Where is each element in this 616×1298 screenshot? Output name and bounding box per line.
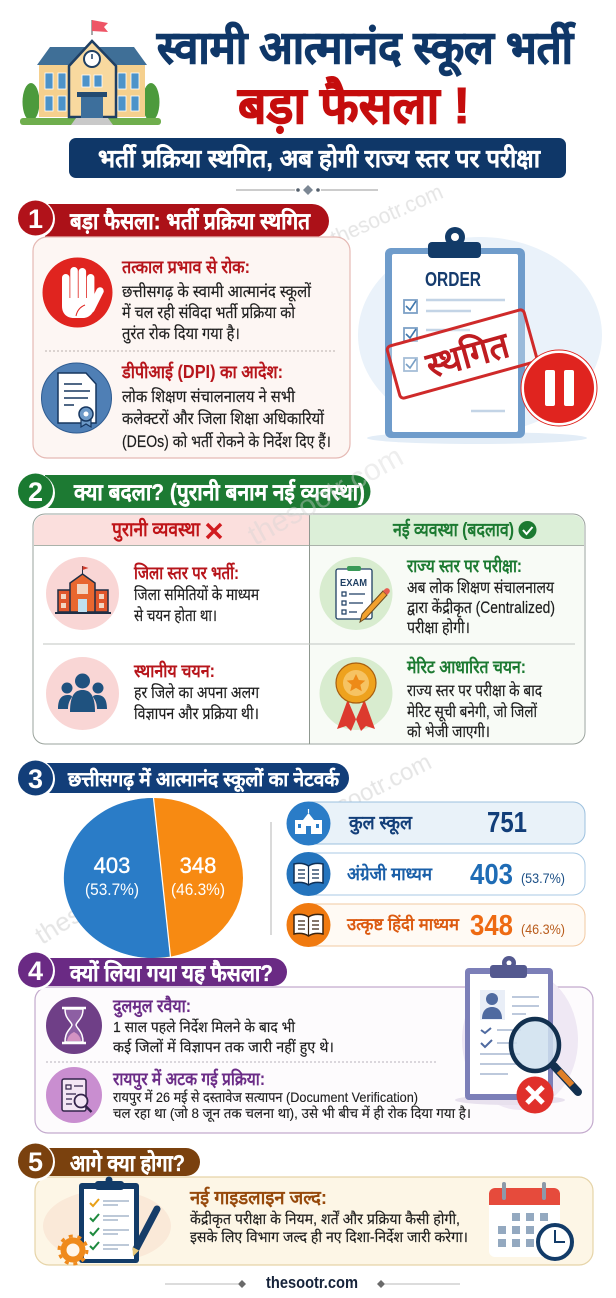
title line 2: बड़ा फैसला !: [237, 76, 470, 134]
slice label: 348: 348: [180, 853, 216, 878]
panel: comparison table: [33, 514, 585, 744]
icon: pen: [132, 1209, 157, 1256]
section 1 heading: [16, 200, 329, 238]
row: district recruitment: से चयन होता था।: [134, 606, 217, 625]
text: stuck in raipur: चल रहा था (जो 8 जून तक चलना था), उसे भी बीच में ही रोक दिया गया है।: [113, 1105, 471, 1122]
watermarks under the content: thesootr.com: [29, 845, 172, 950]
pie chart: school network: [64, 798, 243, 958]
panel: section 5 next steps: [35, 1176, 593, 1265]
text: DPI order: लोक शिक्षण संचालनालय ने सभी: [122, 387, 296, 406]
icon: certificate document: [42, 363, 112, 433]
subtitle banner: भर्ती प्रक्रिया स्थगित, अब होगी राज्य स्तर पर परीक्षा: [98, 144, 541, 173]
illustration: clipboard inspection: [455, 956, 578, 1114]
icon: medal: [320, 657, 392, 731]
watermarks under the content: thesootr.com: [327, 179, 447, 251]
watermarks under the content: thesootr.com: [302, 749, 436, 834]
icon: school: [286, 802, 330, 846]
section 2 heading: क्या बदला? (पुरानी बनाम नई व्यवस्था): [73, 478, 365, 507]
section 5 heading: 5: [28, 1147, 43, 1177]
section 2 heading: 2: [28, 477, 43, 507]
icon: school building: [20, 20, 161, 125]
section 4 heading: 4: [28, 956, 43, 986]
icon: gear: [59, 1236, 87, 1264]
stat row: english medium: अंग्रेजी माध्यम: [347, 863, 433, 884]
stamp: [386, 309, 538, 399]
watermark over table header: thesootr.com: [242, 440, 409, 552]
row: local selection: स्थानीय चयन:: [133, 660, 215, 681]
icon: magnifier: [511, 1019, 578, 1092]
row: district recruitment: [46, 557, 260, 630]
slice label: 403: [85, 853, 139, 899]
text: immediate stop: छत्तीसगढ़ के स्वामी आत्मानंद स्कूलों: [122, 282, 312, 302]
icon: hourglass: [46, 997, 102, 1054]
right column header: [310, 515, 584, 545]
icon: checklist clipboard: [59, 1176, 157, 1264]
section 1 heading: बड़ा फैसला: भर्ती प्रक्रिया स्थगित: [69, 207, 311, 234]
text: new guideline: नई गाइडलाइन जल्द:: [189, 1186, 327, 1209]
text: immediate stop: में चल रही संविदा भर्ती प्रक्रिया को: [122, 303, 296, 322]
stat row: hindi medium: (46.3%): [521, 921, 565, 937]
icon: book: [286, 852, 330, 896]
icon: school: [46, 557, 119, 630]
text: stuck in raipur: [112, 1068, 471, 1122]
icon: document with magnifier: [46, 1067, 102, 1123]
row: state exam: परीक्षा होगी।: [407, 618, 470, 637]
row: merit selection: मेरिट सूची बनेगी, जो जिलों: [407, 702, 538, 722]
stat row: hindi medium: 348: [470, 910, 513, 942]
icon: pause: [521, 350, 597, 426]
title line 1: स्वामी आत्मानंद स्कूल भर्ती: [156, 21, 576, 77]
section 3 heading: [16, 760, 349, 798]
text: immediate stop: [121, 256, 312, 344]
row: state exam: अब लोक शिक्षण संचालनालय: [407, 578, 554, 597]
footer: thesootr.com: [266, 1273, 358, 1292]
panel: section 1 decision: [33, 237, 350, 458]
text: new guideline: इसके लिए विभाग जल्द ही नए दिशा-निर्देश जारी करेगा।: [190, 1228, 468, 1246]
left column header: [34, 515, 310, 545]
row: merit selection: [320, 656, 542, 741]
text: wavering approach: [112, 995, 334, 1057]
text: new guideline: [189, 1186, 468, 1246]
order label: ORDER: [425, 269, 481, 291]
icon: book: [286, 903, 330, 947]
row: district recruitment: जिला स्तर पर भर्ती:: [133, 562, 239, 583]
slice label: 403: (53.7%): [85, 880, 139, 899]
text: new guideline: केंद्रीकृत परीक्षा के नियम, शर्तें और प्रक्रिया कैसी होगी,: [190, 1210, 460, 1229]
stat row: english medium: [286, 852, 585, 896]
icon: group of people: [46, 657, 119, 730]
section 2 heading: [16, 474, 370, 512]
title: [156, 21, 576, 134]
section 5 heading: आगे क्या होगा?: [70, 1149, 185, 1176]
row: local selection: [46, 657, 260, 730]
row: merit selection: राज्य स्तर पर परीक्षा के बाद: [407, 681, 542, 700]
text: DPI order: डीपीआई (DPI) का आदेश:: [121, 361, 283, 382]
section 3 heading: 3: [28, 764, 43, 794]
text: wavering approach: 1 साल पहले निर्देश मिलने के बाद भी: [113, 1018, 296, 1036]
text: immediate stop: तुरंत रोक दिया गया है।: [122, 324, 240, 344]
slice label: 403: 403: [94, 853, 130, 878]
text: stuck in raipur: रायपुर में अटक गई प्रक्रिया:: [112, 1068, 265, 1091]
section 4 heading: क्यों लिया गया यह फैसला?: [69, 959, 273, 986]
stat row: total schools: 751: [487, 807, 527, 839]
icon: red cross: [516, 1076, 554, 1114]
row: merit selection: को भेजी जाएगी।: [407, 722, 490, 741]
text: DPI order: कलेक्टरों और जिला शिक्षा अधिकारियों: [122, 409, 325, 428]
right column header: नई व्यवस्था (बदलाव): [392, 518, 514, 541]
stat row: english medium: (53.7%): [521, 870, 565, 886]
section 3 heading: छत्तीसगढ़ में आत्मानंद स्कूलों का नेटवर्क: [67, 767, 341, 792]
row: local selection: हर जिले का अपना अलग: [134, 683, 260, 702]
footer: [165, 1273, 460, 1292]
row: state exam: [320, 555, 555, 637]
panel: section 4 reasons: [35, 987, 593, 1133]
row: state exam: द्वारा केंद्रीकृत (Centralized): [407, 598, 555, 618]
slice label: 348: [171, 853, 225, 899]
stamp: स्थगित: [421, 324, 515, 386]
text: wavering approach: दुलमुल रवैया:: [112, 995, 191, 1018]
row: merit selection: मेरिट आधारित चयन:: [406, 656, 526, 677]
stat row: hindi medium: [286, 903, 585, 947]
text: immediate stop: तत्काल प्रभाव से रोक:: [121, 256, 250, 277]
stat row: total schools: [286, 802, 585, 846]
row: state exam: राज्य स्तर पर परीक्षा:: [406, 555, 522, 576]
stat row: english medium: 403: [470, 859, 513, 891]
section 1 heading: 1: [28, 204, 43, 234]
icon: stop hand: [42, 258, 112, 328]
section 5 heading: [16, 1142, 200, 1182]
row: district recruitment: जिला समितियों के माध्यम: [134, 585, 260, 604]
watermarks under the content: [29, 179, 447, 950]
stat row: hindi medium: उत्कृष्ट हिंदी माध्यम: [346, 914, 460, 935]
text: DPI order: [121, 361, 331, 451]
icon: exam sheet: [320, 557, 392, 630]
icon: calendar and clock: [489, 1184, 572, 1259]
text: DPI order: (DEOs) को भर्ती रोकने के निर्देश दिए हैं।: [122, 432, 331, 451]
slice label: 348: (46.3%): [171, 880, 225, 899]
text: wavering approach: कई जिलों में विज्ञापन तक जारी नहीं हुए थे।: [113, 1038, 334, 1057]
left column header: पुरानी व्यवस्था: [111, 517, 201, 542]
text: stuck in raipur: रायपुर में 26 मई से दस्तावेज सत्यापन (Document Verification): [113, 1089, 418, 1106]
subtitle banner: [69, 138, 566, 178]
stat row: total schools: कुल स्कूल: [348, 813, 413, 835]
row: local selection: विज्ञापन और प्रक्रिया थी।: [134, 704, 259, 723]
section 4 heading: [16, 952, 287, 990]
illustration: order clipboard with stamp: [358, 227, 602, 444]
icon: exam sheet: EXAM: [340, 578, 367, 589]
